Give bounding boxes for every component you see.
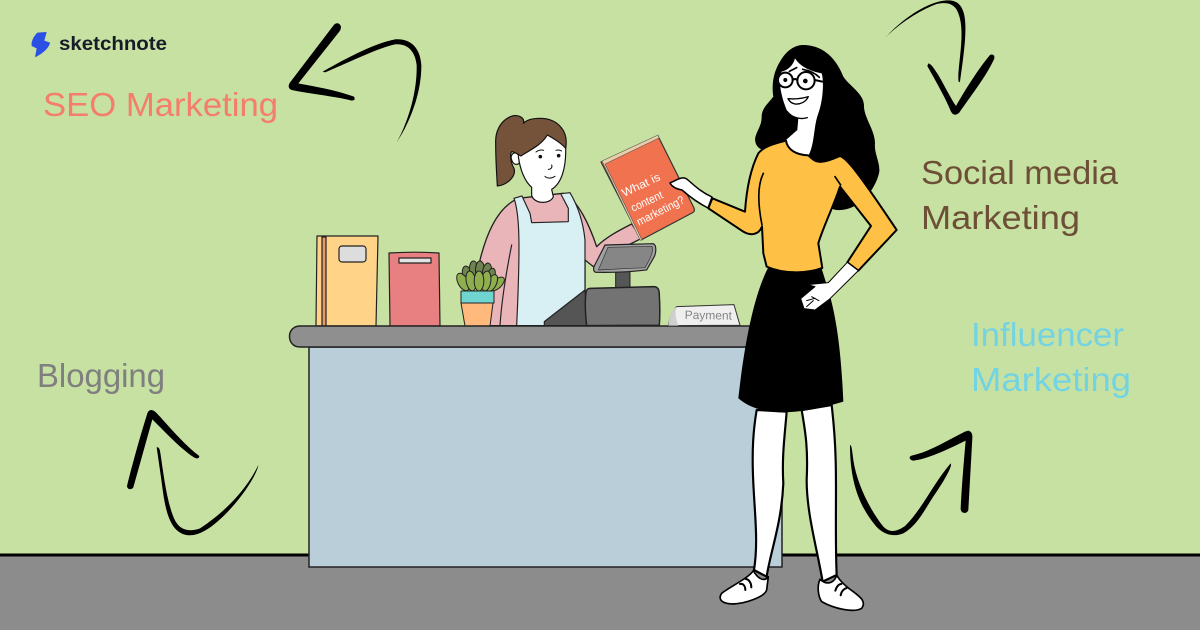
woman smile xyxy=(788,97,808,104)
plant front leaves xyxy=(454,270,507,293)
right shoe xyxy=(818,575,863,610)
register base wedge xyxy=(544,290,587,326)
sweater inner lines xyxy=(759,173,841,225)
eyebrows xyxy=(789,68,819,77)
red notebook xyxy=(389,252,440,326)
woman sweater xyxy=(708,141,897,272)
hand holding book xyxy=(670,178,712,208)
arrow: toward SEO Marketing xyxy=(289,23,421,142)
register stand xyxy=(616,270,630,288)
woman legs and shoes xyxy=(720,405,863,610)
glasses xyxy=(778,72,822,89)
arrow: toward Social media Marketing xyxy=(881,0,994,115)
register front box xyxy=(585,287,660,326)
cashier figure xyxy=(480,116,642,326)
label: Social media Marketing: Marketing xyxy=(921,199,1080,236)
book cover xyxy=(601,136,694,240)
shoe laces xyxy=(740,579,847,595)
woman hair xyxy=(755,45,879,210)
cashier apron xyxy=(514,193,585,326)
right leg xyxy=(802,405,837,582)
book title: content xyxy=(629,189,666,215)
logo: sketchnote xyxy=(32,32,167,57)
label: Influencer Marketing: Marketing xyxy=(971,361,1131,398)
plant pot xyxy=(461,303,493,326)
label: Blogging: Blogging xyxy=(37,357,165,394)
payment sign xyxy=(668,305,740,326)
arrow: toward Influencer Marketing xyxy=(850,431,972,535)
left shoe xyxy=(720,571,768,604)
woman figure xyxy=(708,45,897,412)
jaw line xyxy=(787,112,807,119)
plant back leaves xyxy=(461,261,497,285)
woman skirt xyxy=(738,267,843,412)
icon: lightning bolt xyxy=(32,32,50,57)
arrow: toward Blogging xyxy=(127,410,258,535)
potted plant xyxy=(454,261,507,326)
book: What is content marketing? xyxy=(601,135,694,240)
cashier face and neck xyxy=(511,133,566,202)
book spine edge xyxy=(602,135,659,240)
cashier hair xyxy=(496,116,566,186)
book title: What is xyxy=(620,171,663,200)
cashier facial features xyxy=(536,150,562,178)
woman face and neck xyxy=(780,58,823,156)
register screen xyxy=(594,244,656,272)
label: Influencer Marketing: Influencer xyxy=(971,316,1124,353)
counter base xyxy=(309,347,782,567)
left leg xyxy=(753,410,787,577)
label: Social media Marketing xyxy=(921,154,1119,236)
cashier body: pink shirt xyxy=(480,193,642,326)
label: Influencer Marketing xyxy=(971,316,1131,398)
book title: marketing? xyxy=(635,194,687,229)
yellow notebook xyxy=(316,236,378,326)
hand on hip xyxy=(801,262,858,310)
floor xyxy=(0,554,1200,630)
label: SEO Marketing: SEO Marketing xyxy=(43,86,278,123)
payment sign: Payment xyxy=(685,308,733,323)
label: Social media Marketing: Social media xyxy=(921,154,1119,191)
counter top xyxy=(290,326,770,347)
cash register and sign xyxy=(544,244,740,326)
book title xyxy=(620,171,687,229)
logo wordmark: sketchnote xyxy=(59,34,167,55)
counter xyxy=(290,326,782,567)
